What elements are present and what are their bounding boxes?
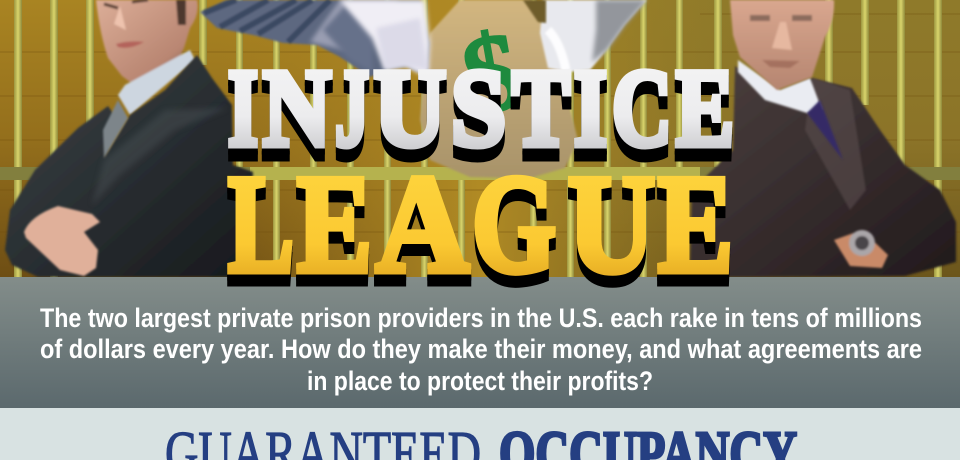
left man lapel highlight xyxy=(95,108,218,198)
title line: INJUSTICE: E xyxy=(676,53,734,175)
title line: INJUSTICE: U xyxy=(374,47,446,169)
title line: LEAGUE: G xyxy=(472,153,556,308)
right man hand and watch xyxy=(834,230,888,268)
title line: LEAGUE: E xyxy=(658,159,733,314)
title line: INJUSTICE: I xyxy=(228,47,258,169)
dollar sign: $ xyxy=(453,8,530,140)
intro text xyxy=(40,303,922,396)
title line: INJUSTICE: J xyxy=(335,60,369,182)
title line: LEAGUE xyxy=(227,174,730,288)
title line: LEAGUE: G xyxy=(472,159,556,314)
right man shirt xyxy=(738,60,822,113)
title line: INJUSTICE: N xyxy=(263,53,331,175)
title line: INJUSTICE: J xyxy=(335,53,369,175)
title line: INJUSTICE: T xyxy=(512,47,570,169)
title line: LEAGUE: E xyxy=(297,147,372,302)
title line: INJUSTICE: I xyxy=(574,47,607,169)
left man tie xyxy=(103,100,128,158)
right man face and neck xyxy=(730,0,834,90)
title line: INJUSTICE: N xyxy=(263,60,331,182)
prison wall background xyxy=(0,0,960,277)
right man lapel shading xyxy=(805,78,866,210)
title line: LEAGUE: A xyxy=(376,159,469,314)
title line: INJUSTICE: I xyxy=(574,53,607,175)
panel: introduction xyxy=(0,174,960,408)
title line: INJUSTICE: S xyxy=(451,47,506,169)
title line: INJUSTICE: C xyxy=(612,60,672,182)
title line: LEAGUE: E xyxy=(658,153,733,308)
left man hand xyxy=(24,206,100,276)
title line: INJUSTICE: T xyxy=(512,60,570,182)
title line: LEAGUE: E xyxy=(297,153,372,308)
right man suit xyxy=(690,66,956,277)
title line: LEAGUE: L xyxy=(228,147,294,302)
left man face and neck xyxy=(96,0,198,115)
left man shirt xyxy=(118,50,195,115)
title line: INJUSTICE xyxy=(228,68,732,162)
title line: INJUSTICE: U xyxy=(374,60,446,182)
money bag xyxy=(420,0,578,178)
title line: INJUSTICE: C xyxy=(612,53,672,175)
title line: LEAGUE: U xyxy=(568,159,655,314)
title line: LEAGUE: A xyxy=(376,147,469,302)
intro text: in place to protect their profits? xyxy=(307,366,653,396)
title line: LEAGUE: L xyxy=(228,153,294,308)
title line: LEAGUE: G xyxy=(472,147,556,302)
figure: right executive xyxy=(690,0,956,277)
title line: LEAGUE: E xyxy=(658,147,733,302)
prison bars xyxy=(14,0,942,277)
title line: LEAGUE: U xyxy=(568,147,655,302)
left man suit xyxy=(5,55,253,277)
title line: LEAGUE: L xyxy=(228,159,294,314)
illustration: flying money bag xyxy=(200,0,647,178)
title line: INJUSTICE: U xyxy=(374,53,446,175)
title line: INJUSTICE: I xyxy=(228,53,258,175)
title line: INJUSTICE: J xyxy=(335,47,369,169)
panel: guaranteed occupancy xyxy=(165,420,798,460)
title line: INJUSTICE: I xyxy=(574,60,607,182)
left wing xyxy=(200,0,430,78)
title line: INJUSTICE: N xyxy=(263,47,331,169)
title line: INJUSTICE: C xyxy=(612,47,672,169)
section heading xyxy=(165,420,797,460)
right wing xyxy=(540,0,647,72)
figure: left executive xyxy=(5,0,253,277)
title line: LEAGUE: A xyxy=(376,153,469,308)
title line: LEAGUE: E xyxy=(297,159,372,314)
title line: INJUSTICE: S xyxy=(451,53,506,175)
title line: INJUSTICE: T xyxy=(512,53,570,175)
title line: INJUSTICE: E xyxy=(676,60,734,182)
title line: INJUSTICE: S xyxy=(451,60,506,182)
bag tie shadow xyxy=(523,0,546,23)
title line: INJUSTICE: I xyxy=(228,60,258,182)
title line: LEAGUE: U xyxy=(568,153,655,308)
title line: INJUSTICE: E xyxy=(676,47,734,169)
right man tie xyxy=(807,100,843,160)
